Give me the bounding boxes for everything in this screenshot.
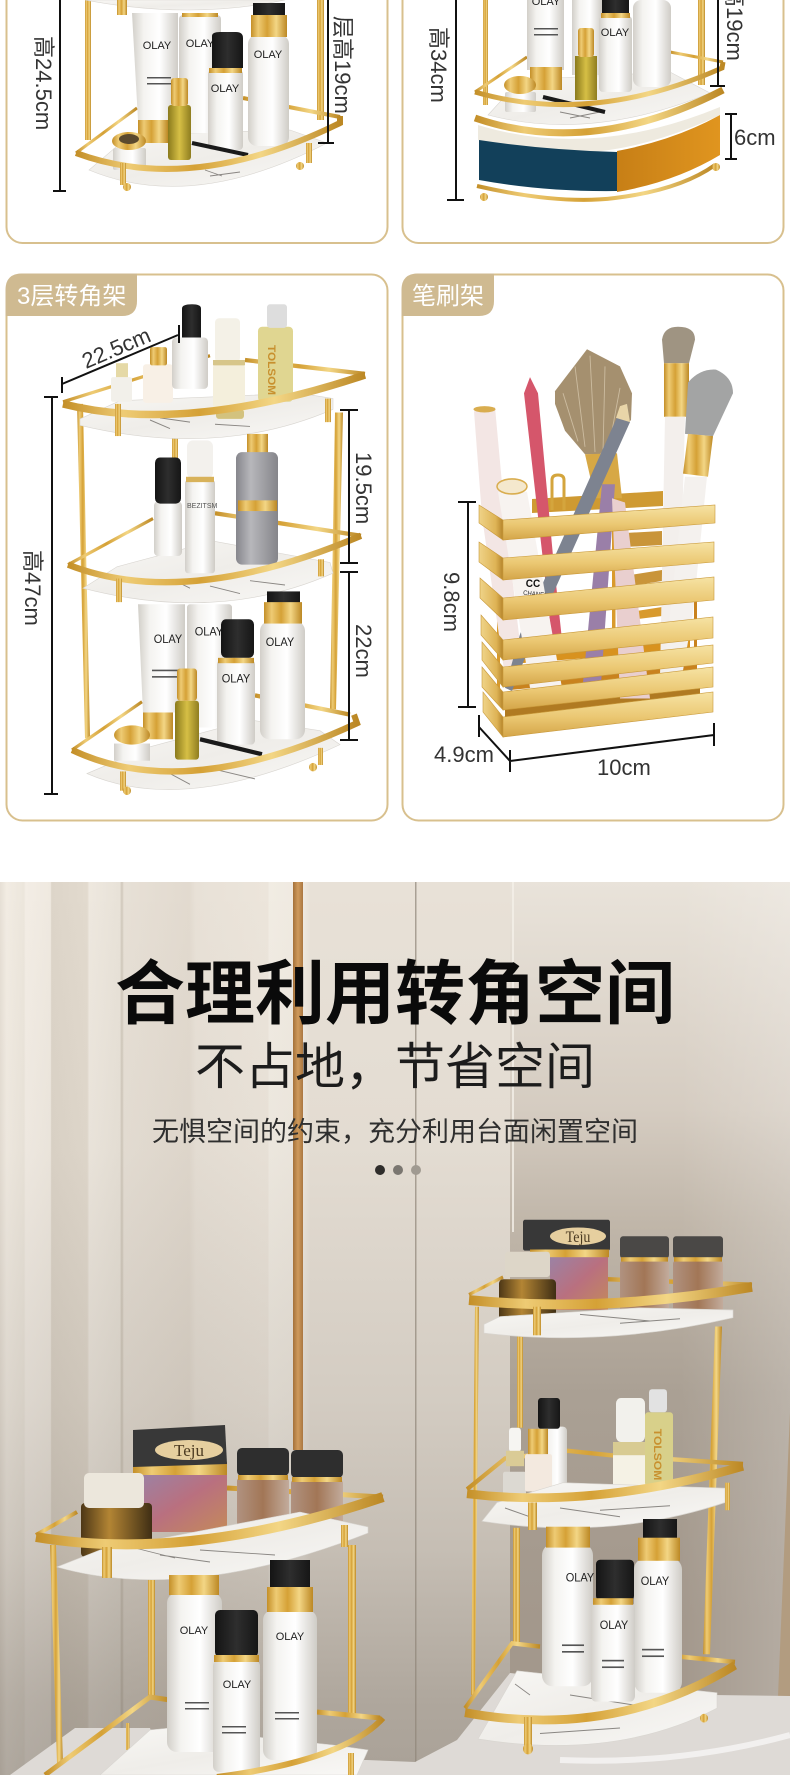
bottle: right xyxy=(263,1560,317,1760)
products: box: Teju xyxy=(566,1229,591,1246)
bottle: tube xyxy=(132,13,178,143)
dimension: tier height 19cm: 层高19cm xyxy=(330,16,355,114)
purple brush xyxy=(582,484,615,699)
dimension: height 34cm: 高34cm xyxy=(426,27,451,103)
products: box xyxy=(523,1220,610,1310)
bottle: right xyxy=(634,1519,682,1693)
drawer: orange xyxy=(617,115,720,192)
panel: 2-tier corner shelf dimensions xyxy=(6,0,388,243)
dimension: 19.5cm xyxy=(340,410,376,563)
drawer: teal xyxy=(479,140,617,191)
products: perfume xyxy=(499,1252,556,1323)
tan brush xyxy=(660,327,695,677)
dimension: 19.5cm: 19.5cm xyxy=(351,452,376,524)
dimension: tier height 19cm xyxy=(318,0,355,143)
tag: brush holder: 笔刷架 xyxy=(412,283,484,310)
pagination dots xyxy=(375,1165,421,1175)
subtitle: 不占地，节省空间 xyxy=(195,1039,595,1095)
lower tier bottles: OLAY xyxy=(266,637,295,649)
grey brush xyxy=(662,370,733,688)
lower tier bottles xyxy=(114,591,305,761)
shelf: drawer base shelf xyxy=(475,0,723,201)
basket back bars xyxy=(497,475,700,728)
bottle: right: OLAY xyxy=(641,1576,670,1588)
dimension: height 47cm: 高47cm xyxy=(20,550,45,626)
bottle: centre xyxy=(213,1610,260,1772)
bottle: pump: OLAY xyxy=(601,27,630,39)
Chanel tube: CC xyxy=(526,579,541,590)
bottle: back: OLAY xyxy=(186,38,215,50)
dimension: 22cm: 22cm xyxy=(351,624,376,678)
shelf: 2-tier corner shelf xyxy=(76,0,340,191)
dimension: depth 4.9cm xyxy=(434,715,510,767)
bottle: left: OLAY xyxy=(180,1625,209,1637)
brushes and pencils xyxy=(474,327,733,699)
dimension: height 9.8cm: 9.8cm xyxy=(439,572,464,632)
shelf: 3-tier frame xyxy=(63,304,365,795)
lower tier bottles: OLAY xyxy=(222,673,251,686)
dimension: height 24.5cm xyxy=(31,0,66,191)
bottle: left xyxy=(542,1527,595,1686)
dimension: height 9.8cm xyxy=(439,502,476,707)
Chanel tube: CHANEL xyxy=(523,589,548,599)
products: jar 2 xyxy=(673,1236,723,1312)
white tube xyxy=(474,407,524,677)
dimension: height 34cm xyxy=(426,0,464,200)
dimension: height 24.5cm: 高24.5cm xyxy=(31,36,56,130)
tag: brush holder xyxy=(402,274,494,316)
jar xyxy=(112,132,146,170)
panel: corner shelf with drawers dimensions xyxy=(402,0,784,243)
middle products: TOLSOM xyxy=(651,1429,663,1480)
dimension: tier height 19cm xyxy=(710,0,747,86)
lower tier bottles: OLAY xyxy=(154,634,183,646)
bottle: tube: OLAY xyxy=(143,40,172,52)
products: jar 2 xyxy=(291,1450,343,1537)
tag: 3-tier corner shelf: 3层转角架 xyxy=(17,283,126,310)
title: 合理利用转角空间 xyxy=(115,955,675,1033)
tag: 3-tier corner shelf xyxy=(6,274,137,316)
top tier bottles: TOLSOM xyxy=(265,345,277,395)
panel: 3-tier corner shelf xyxy=(6,274,388,820)
bottle: pump: OLAY xyxy=(211,83,240,95)
bottle: centre: OLAY xyxy=(223,1679,252,1691)
bottle: dropper xyxy=(168,78,191,160)
dimension: 22cm xyxy=(340,572,376,740)
bottle: centre: OLAY xyxy=(600,1620,629,1632)
red pencil xyxy=(524,377,562,640)
photo: corner shelves in room xyxy=(0,882,790,1775)
products: jar 1 xyxy=(620,1236,669,1312)
description: 无惧空间的约束，充分利用台面闲置空间 xyxy=(152,1117,638,1147)
dimension: height 47cm xyxy=(20,397,58,794)
bottle: right: OLAY xyxy=(276,1631,305,1643)
powder brush xyxy=(555,349,632,498)
bottle: back xyxy=(179,13,221,133)
background wall xyxy=(0,882,790,1775)
products: box xyxy=(133,1425,227,1532)
bottle: right: OLAY xyxy=(254,49,283,61)
products: jar 1 xyxy=(237,1448,289,1528)
products: box: Teju xyxy=(174,1441,204,1460)
marble counter xyxy=(10,1673,790,1775)
dimension: width 22.5cm: 22.5cm xyxy=(78,322,154,374)
bottle: right xyxy=(248,3,289,146)
panel: brush holder xyxy=(402,274,784,820)
Chanel tube xyxy=(497,479,562,688)
middle tier bottles: BEZITSM xyxy=(187,501,217,510)
bottle: centre xyxy=(591,1560,635,1702)
dimension: drawer 6cm: 6cm xyxy=(734,125,776,150)
dimension: drawer 6cm xyxy=(725,114,776,159)
bottle: tube xyxy=(527,0,564,90)
dimension: width 10cm xyxy=(510,723,714,780)
bottle: dropper xyxy=(575,28,597,100)
bottle: left: OLAY xyxy=(566,1572,595,1585)
top tier bottles xyxy=(111,304,293,419)
middle products xyxy=(503,1389,673,1508)
pink brush handle xyxy=(612,498,650,699)
bottle: pump xyxy=(599,0,632,92)
basket front bars xyxy=(479,505,715,737)
left corner shelf xyxy=(36,1425,383,1775)
bottle: left xyxy=(167,1575,222,1752)
dimension: width 10cm: 10cm xyxy=(597,755,651,780)
jar xyxy=(504,76,536,112)
grey pencil xyxy=(505,404,630,691)
middle tier bottles xyxy=(154,434,278,573)
products: perfume xyxy=(81,1473,152,1557)
dimension: depth 4.9cm: 4.9cm xyxy=(434,742,494,767)
dimension: width 22.5cm xyxy=(62,322,179,393)
bottle: pump xyxy=(208,32,243,150)
right corner shelf xyxy=(465,1220,752,1754)
lower tier bottles: OLAY xyxy=(195,626,224,638)
